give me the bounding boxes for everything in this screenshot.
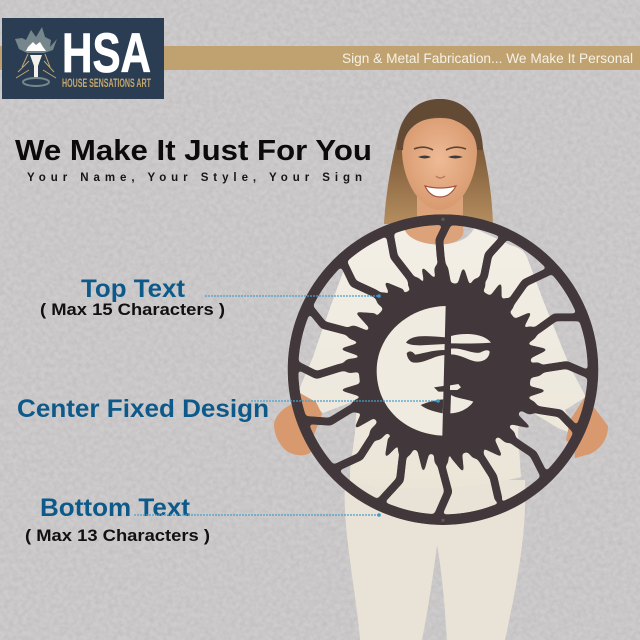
heading: We Make It Just For You: [15, 135, 372, 167]
logo wordmark HSA: HSA: [62, 21, 151, 84]
right brow and eye cutout: [451, 334, 491, 343]
callout: top text: [40, 275, 381, 319]
logo icon: torch with lotus flame: [15, 27, 57, 86]
person holding sign: [274, 99, 608, 640]
hair back: [384, 99, 493, 224]
callout: center fixed design: Center Fixed Design: [17, 395, 269, 423]
center leader line: [251, 399, 440, 403]
metal sign: sun and moon: [293, 218, 593, 522]
neck: [404, 195, 464, 244]
eyes and brows: [414, 147, 466, 150]
sun small flames: [339, 266, 548, 474]
left hand: [274, 392, 322, 455]
pants: [345, 480, 525, 640]
subheading: Your Name, Your Style, Your Sign: [27, 172, 362, 184]
left nose and lips: [434, 386, 446, 392]
left brow and eye: [406, 336, 446, 345]
callout: bottom text: [25, 494, 381, 545]
top leader line: [205, 294, 381, 298]
callout: bottom text: Bottom Text: [40, 494, 191, 522]
sun long rays: [297, 222, 590, 517]
callout: center fixed design: [17, 395, 440, 423]
shirt torso and sleeves: [298, 228, 586, 489]
hair top: [397, 99, 483, 150]
callout: top text: Top Text: [81, 275, 186, 303]
bottom leader line: [134, 513, 381, 517]
right hand: [566, 397, 608, 458]
bottom text limit: ( Max 13 Characters ): [25, 526, 210, 545]
mounting screws: [441, 218, 445, 221]
top text limit: ( Max 15 Characters ): [40, 300, 225, 319]
mouth: [425, 186, 456, 197]
crescent moon cutout: [377, 306, 446, 436]
sun silhouette: ring, rays, flames, body: [293, 220, 593, 520]
logo subtitle: HOUSE SENSATIONS ART: [62, 78, 151, 90]
nose: [436, 176, 445, 178]
banner tagline: Sign & Metal Fabrication... We Make It Personal: [342, 51, 633, 66]
banner strip: [0, 46, 640, 70]
sun body: [359, 283, 531, 455]
right nose and lips cutout: [450, 384, 461, 390]
ring: [293, 220, 593, 520]
sun ray bases: [350, 270, 537, 460]
face: [402, 118, 477, 210]
logo block: [2, 18, 164, 99]
